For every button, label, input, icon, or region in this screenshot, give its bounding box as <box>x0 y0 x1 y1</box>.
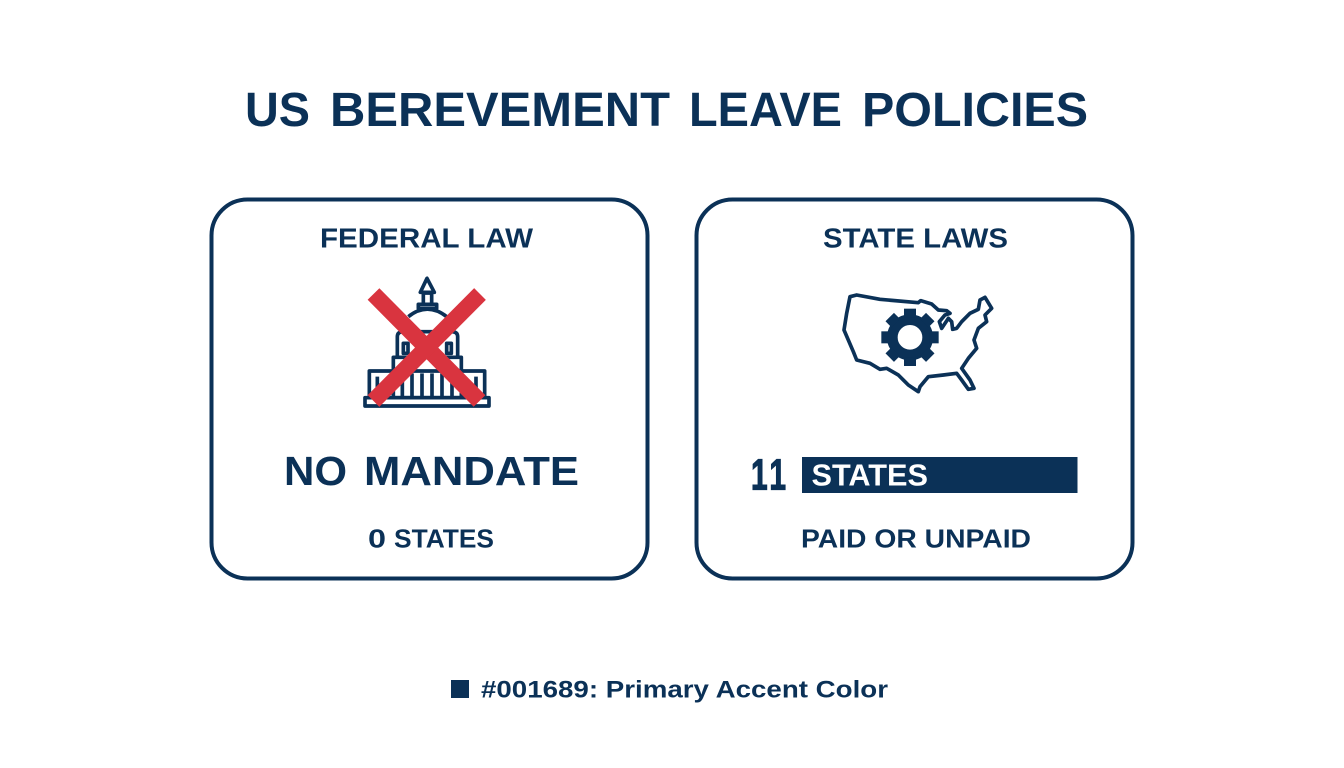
title: US <box>245 83 310 137</box>
no mandate statement: NO <box>284 448 347 494</box>
title: POLICIES <box>862 83 1088 137</box>
legend: #001689: Primary Accent Color <box>481 676 889 704</box>
states bar <box>802 457 1078 493</box>
federal law heading: FEDERAL LAW <box>320 222 533 254</box>
panel: federal law <box>212 200 648 578</box>
states bar: STATES <box>812 458 928 492</box>
panel: state laws <box>696 200 1132 578</box>
title: BEREVEMENT <box>330 83 670 137</box>
11 states number: 11 <box>751 450 786 499</box>
paid or unpaid label: PAID OR UNPAID <box>801 524 1031 554</box>
state laws heading: STATE LAWS <box>823 222 1008 254</box>
icon: capitol building crossed out <box>365 278 489 406</box>
title <box>245 83 1088 137</box>
red cross <box>374 294 480 401</box>
title: LEAVE <box>689 83 842 137</box>
no mandate statement: MANDATE <box>364 448 579 494</box>
icon: US map with gear <box>844 295 992 392</box>
US map outline <box>844 295 992 392</box>
capitol building <box>365 278 489 406</box>
no mandate statement <box>284 448 579 494</box>
gear <box>881 309 939 366</box>
zero states label: STATES <box>394 524 494 554</box>
zero states label: 0 <box>368 524 386 554</box>
